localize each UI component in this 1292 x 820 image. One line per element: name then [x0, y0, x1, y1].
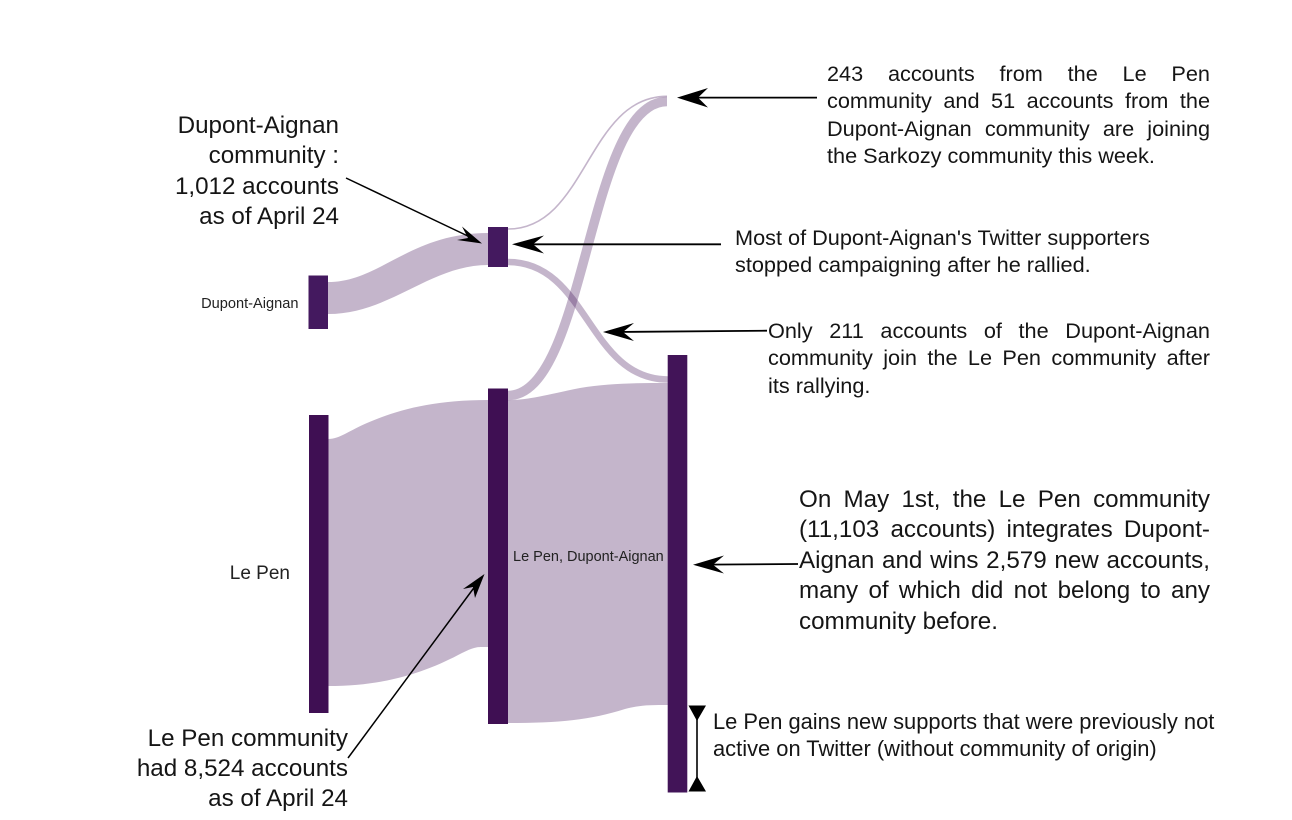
text: new supporters: active on Twitter (without community of origin) [713, 736, 1157, 761]
text: May 1st integration: Aignan and wins 2,579 new accounts, [799, 547, 1210, 574]
flow: Le Pen to Sarkozy [508, 102, 667, 396]
arrow: to Dupont-Aignan node [512, 236, 721, 254]
text: 211 accounts: its rallying. [768, 373, 870, 398]
bracket: new supporters range [688, 706, 706, 792]
text: new supporters [713, 709, 1214, 761]
callout: Dupont-Aignan community: as of April 24 [199, 203, 339, 230]
callout: Dupont-Aignan community: community : [209, 142, 339, 169]
flow: Dupont-Aignan to Sarkozy [508, 96, 667, 229]
arrow: to Sarkozy community [677, 88, 817, 108]
text: May 1st integration: On May 1st, the Le Pen community [799, 486, 1210, 513]
node label: Le Pen, Dupont-Aignan: Le Pen, Dupont-Aignan [513, 549, 664, 565]
callout: Le Pen community: Le Pen community [148, 724, 348, 752]
arrow: to Le Pen, Dupont-Aignan node [693, 556, 798, 574]
text: Sarkozy community [827, 61, 1210, 168]
text: 211 accounts: Only 211 accounts of the Dupont-Aignan [768, 318, 1210, 343]
callout: Le Pen community [137, 724, 348, 812]
callout: Le Pen community: as of April 24 [208, 785, 348, 812]
text: May 1st integration: (11,103 accounts) integrates Dupont- [799, 516, 1210, 543]
text: Sarkozy community: the Sarkozy community this week. [827, 143, 1155, 168]
text: May 1st integration [799, 486, 1210, 635]
flow: Le Pen to Le Pen, Dupont-Aignan [508, 383, 668, 723]
node: Le Pen April 24 [309, 415, 328, 713]
arrow: to Dupont-Aignan to Le Pen flow [603, 323, 767, 341]
flow: Le Pen to Le Pen [328, 400, 488, 686]
text: Dupont-Aignan supporters: Most of Dupont-Aignan's Twitter supporters [735, 225, 1150, 250]
arrow: Dupont-Aignan community callout [346, 178, 482, 244]
node: Le Pen, Dupont-Aignan [668, 355, 687, 792]
arrow: Le Pen community callout [348, 574, 484, 758]
node: Le Pen May 1 [488, 388, 508, 724]
node: Dupont-Aignan April 24 [308, 276, 328, 329]
text: new supporters: Le Pen gains new supports that were previously not [713, 709, 1214, 734]
text: Dupont-Aignan supporters: stopped campaigning after he rallied. [735, 252, 1091, 277]
node label: Dupont-Aignan: Dupont-Aignan [201, 296, 298, 312]
callout: Le Pen community: had 8,524 accounts [137, 755, 348, 782]
text: Sarkozy community: community and 51 accounts from the [827, 88, 1210, 113]
callout: Dupont-Aignan community [175, 112, 339, 230]
callout: Dupont-Aignan community: Dupont-Aignan [178, 112, 339, 139]
text: 211 accounts [768, 318, 1210, 398]
text: May 1st integration: community before. [799, 608, 998, 635]
flow: Dupont-Aignan to Le Pen [508, 262, 668, 380]
flow: Dupont-Aignan to Dupont-Aignan [328, 233, 488, 314]
text: Sarkozy community: 243 accounts from the Le Pen [827, 61, 1210, 86]
text: May 1st integration: many of which did not belong to any [799, 577, 1210, 604]
node: Dupont-Aignan May 1 [488, 227, 508, 267]
text: 211 accounts: community join the Le Pen community after [768, 345, 1210, 370]
text: Sarkozy community: Dupont-Aignan community are joining [827, 116, 1210, 141]
text: Dupont-Aignan supporters [735, 225, 1150, 277]
node label: Le Pen: Le Pen [230, 563, 290, 584]
callout: Dupont-Aignan community: 1,012 accounts [175, 173, 339, 200]
